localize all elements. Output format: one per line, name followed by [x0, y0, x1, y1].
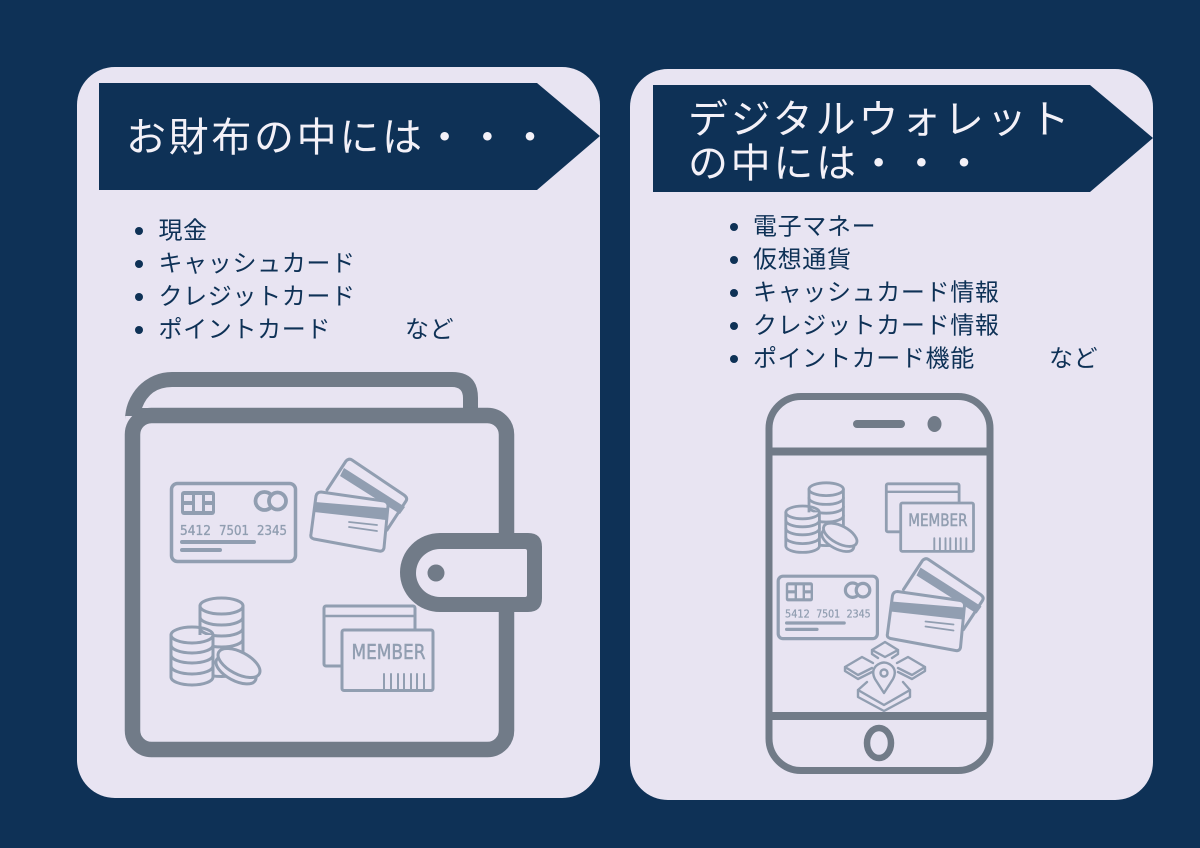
bullet list: wallet items: 現金 — [158, 218, 208, 244]
icon: smartphone outline — [769, 396, 990, 770]
icon: coin stacks — [786, 483, 861, 556]
icon: member card — [324, 606, 433, 690]
heading banner: digital wallet: の中には・・・ — [688, 142, 984, 186]
heading banner: wallet: お財布の中には・・・ — [126, 116, 550, 160]
bullet list: wallet items: など — [405, 316, 454, 344]
icon: member card: MEMBER — [352, 640, 426, 664]
heading banner: digital wallet: デジタルウォレット — [688, 98, 1070, 142]
icon: credit card: 5412 — [180, 524, 211, 539]
icon: coin stacks — [171, 598, 264, 690]
icon: credit card — [778, 576, 877, 639]
bullet list: wallet items: クレジットカード — [158, 284, 356, 310]
icon: member card: MEMBER — [908, 511, 967, 530]
bullet list: wallet items: キャッシュカード — [158, 250, 356, 278]
panel: wallet contents — [77, 67, 600, 798]
bullet list: digital wallet items: など — [1049, 346, 1098, 372]
icon: wallet outline — [125, 372, 542, 750]
icon: credit card — [172, 484, 296, 562]
icon: stacked cards — [887, 559, 983, 651]
bullet list: digital wallet items — [730, 214, 1098, 372]
icon: credit card: 7501 — [816, 608, 840, 620]
bullet list: digital wallet items: クレジットカード情報 — [753, 312, 1000, 340]
icon: stacked cards — [311, 459, 407, 551]
icon: credit card: 7501 — [219, 524, 249, 539]
bullet list: wallet items: ポイントカード — [158, 316, 331, 344]
icon: credit card: 2345 — [257, 524, 287, 539]
icon: credit card: 5412 — [785, 608, 810, 620]
bullet list: digital wallet items: 仮想通貨 — [753, 246, 852, 274]
heading banner: wallet — [99, 83, 600, 190]
heading banner: digital wallet — [653, 85, 1153, 192]
bullet list: digital wallet items: ポイントカード機能 — [753, 346, 975, 372]
icon: crypto location blocks — [845, 642, 925, 711]
bullet list: wallet items — [135, 218, 454, 344]
icon: credit card: 2345 — [847, 608, 871, 620]
icon: member card — [886, 484, 974, 551]
panel: digital wallet contents — [630, 69, 1153, 800]
bullet list: digital wallet items: 電子マネー — [753, 214, 876, 240]
bullet list: digital wallet items: キャッシュカード情報 — [753, 280, 1000, 306]
